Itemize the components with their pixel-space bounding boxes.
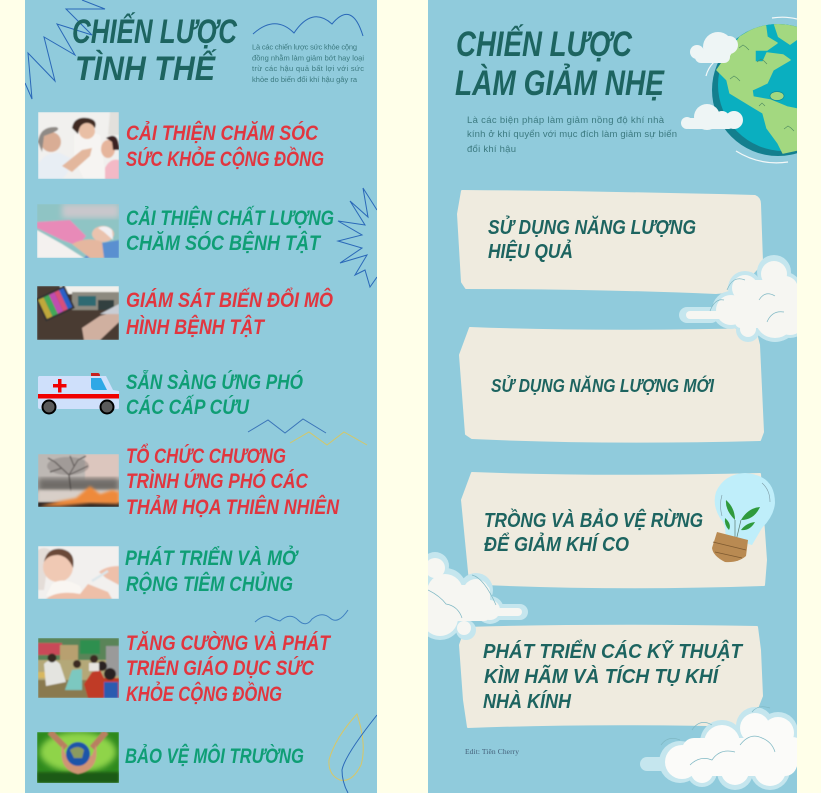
card 3 text: TRỒNG VÀ BẢO VỆ RỪNG: [484, 508, 703, 532]
item 2 label: CẢI THIỆN CHẤT LƯỢNG: [126, 206, 334, 230]
item 6 label: [125, 546, 299, 596]
card 3 text: ĐỂ GIẢM KHÍ CO: [484, 533, 629, 556]
icon: globe with clouds: [681, 16, 797, 164]
card 4 text: [483, 639, 744, 713]
item 5 label: TRÌNH ỨNG PHÓ CÁC: [126, 469, 309, 493]
item 2 label: [126, 206, 334, 255]
item 7 photo: [38, 638, 119, 698]
item 6 photo: [38, 546, 119, 599]
icon: light bulb with leaves: [712, 473, 775, 562]
item 4 label: [126, 370, 303, 419]
cloud left: [418, 552, 528, 640]
item 7 label: TĂNG CƯỜNG VÀ PHÁT: [126, 631, 332, 655]
decorative scribbles: [25, 0, 377, 793]
card 1 text: SỬ DỤNG NĂNG LƯỢNG: [488, 216, 696, 239]
item 1 photo: [38, 112, 119, 179]
item 3 label: [126, 288, 333, 339]
small cloud lower: [681, 104, 743, 130]
icon: ambulance: [38, 373, 119, 414]
item 3 label: HÌNH BỆNH TẬT: [126, 315, 266, 339]
intro text: đồng nhằm làm giảm bớt hay loại: [252, 54, 364, 62]
item 1 label: SỨC KHỎE CỘNG ĐỒNG: [126, 147, 324, 171]
item 6 label: RỘNG TIÊM CHỦNG: [126, 572, 293, 596]
item 1 label: [126, 121, 324, 171]
item 4 label: SẴN SÀNG ỨNG PHÓ: [126, 370, 303, 394]
item 5 label: [126, 444, 340, 519]
intro text: [252, 42, 364, 84]
cloud top right: [679, 255, 808, 342]
card 1: [458, 191, 762, 293]
card 3: [462, 473, 766, 587]
cloud bottom right: [640, 707, 810, 790]
item 7 label: KHỎE CỘNG ĐỒNG: [126, 682, 282, 706]
item 1 label: CẢI THIỆN CHĂM SÓC: [126, 121, 319, 145]
card 1 text: HIỆU QUẢ: [488, 239, 573, 263]
item 3 label: GIÁM SÁT BIẾN ĐỔI MÔ: [126, 288, 333, 312]
item 5 label: TỔ CHỨC CHƯƠNG: [126, 444, 286, 468]
item 3 photo: [35, 285, 119, 340]
intro text: trừ các hậu quả bất lợi với sức: [252, 64, 364, 73]
intro text: Là các biện pháp làm giảm nồng độ khí nhà: [467, 115, 665, 126]
small cloud top: [690, 32, 738, 63]
card 4 text: PHÁT TRIỂN CÁC KỸ THUẬT: [483, 639, 744, 663]
title: CHIẾN LƯỢC: [72, 13, 237, 51]
credit: Edit: Tiên Cherry: [465, 747, 519, 756]
card 4: [460, 626, 762, 727]
intro text: [467, 115, 677, 155]
card 3 text: [484, 508, 703, 556]
panel: coping strategies: [25, 0, 377, 793]
item 8 photo: [37, 732, 119, 783]
item 2 label: CHĂM SÓC BỆNH TẬT: [126, 231, 322, 255]
item 5 label: THẢM HỌA THIÊN NHIÊN: [126, 495, 340, 519]
card 1 text: [488, 216, 696, 263]
item 8 label: BẢO VỆ MÔI TRƯỜNG: [125, 744, 304, 768]
intro text: kính ở khí quyển với mục đích làm giảm sự biến: [467, 129, 677, 140]
card 2: [460, 328, 763, 442]
item 7 label: TRIỂN GIÁO DỤC SỨC: [126, 656, 315, 680]
item 5 photo: [38, 454, 119, 507]
card 2 text: SỬ DỤNG NĂNG LƯỢNG MỚI: [491, 375, 715, 396]
panel: mitigation strategies: [418, 0, 821, 793]
intro text: khỏe do biến đổi khí hậu gây ra: [252, 75, 358, 84]
item 2 photo: [37, 204, 119, 258]
card 4 text: KÌM HÃM VÀ TÍCH TỤ KHÍ: [484, 665, 721, 688]
title: TÌNH THẾ: [75, 50, 217, 88]
item 6 label: PHÁT TRIỂN VÀ MỞ: [125, 546, 299, 570]
item 7 label: [126, 631, 332, 706]
intro text: Là các chiến lược sức khỏe cộng: [252, 42, 357, 52]
title: [72, 13, 237, 88]
item 4 label: CÁC CẤP CỨU: [126, 395, 250, 419]
title: CHIẾN LƯỢC: [456, 24, 633, 64]
title: [455, 24, 665, 103]
title: LÀM GIẢM NHẸ: [455, 63, 665, 103]
intro text: đổi khí hậu: [467, 144, 516, 155]
card 4 text: NHÀ KÍNH: [483, 690, 571, 713]
